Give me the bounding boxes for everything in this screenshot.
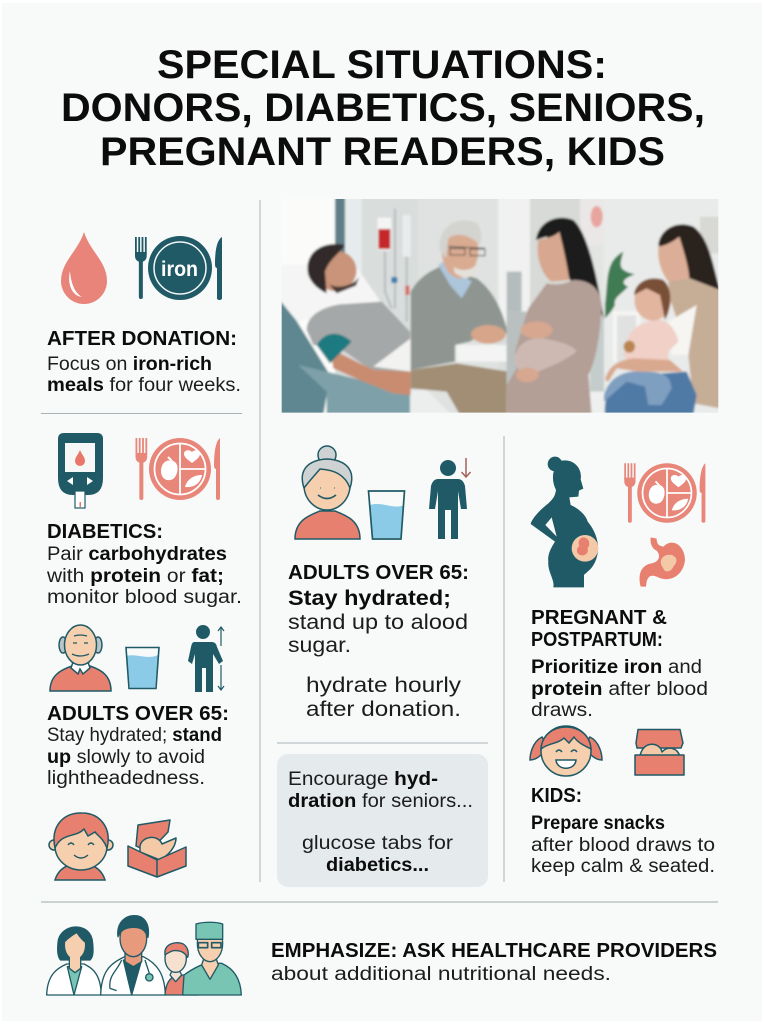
text: emphasize xyxy=(271,940,717,985)
icon: balanced plate, diabetics xyxy=(136,438,220,500)
surgeon xyxy=(183,922,241,995)
text: diabetics: with protein or fat; xyxy=(46,566,224,587)
title: PREGNANT READERS, KIDS xyxy=(100,130,665,174)
icon: blood drop xyxy=(61,232,107,304)
callout: seniors and diabetics tips: glucose tabs for xyxy=(302,833,454,854)
text: after donation: AFTER DONATION: xyxy=(47,328,237,350)
title: DONORS, DIABETICS, SENIORS, xyxy=(61,86,705,130)
icon: iron plate with fork and knife xyxy=(135,236,222,300)
text: adults over 65, left column: up slowly to avoid xyxy=(47,747,205,768)
text: emphasize: EMPHASIZE: ASK HEALTHCARE PROVIDERS xyxy=(271,940,717,962)
text: kids: after blood draws to xyxy=(531,835,715,856)
icon: figure with down arrow xyxy=(429,458,470,539)
male doctor with stethoscope xyxy=(101,916,165,995)
text: pregnant and postpartum: Prioritize iron and xyxy=(531,657,702,678)
icon: smiling boy xyxy=(49,813,113,880)
text: diabetics: monitor blood sugar. xyxy=(47,587,242,608)
callout: seniors and diabetics tips: diabetics... xyxy=(326,855,429,876)
icon: snack box xyxy=(128,820,186,877)
icon: balanced plate, pregnant xyxy=(624,463,705,523)
icon: healthcare team xyxy=(47,916,241,995)
icon: older man xyxy=(50,625,111,691)
text: kids: Prepare snacks xyxy=(531,813,665,834)
text: adults over 65, centre column: ADULTS OVER 65: xyxy=(288,562,469,584)
icon: smiling girl with pigtails xyxy=(530,726,602,776)
text: pregnant and postpartum: draws. xyxy=(531,700,593,721)
text: adults over 65, left column xyxy=(47,703,229,789)
text: adults over 65, left column: Stay hydrated; stand xyxy=(47,725,222,746)
icon: grandmother xyxy=(295,446,360,539)
text: kids: KIDS: xyxy=(531,785,582,807)
text: emphasize: about additional nutritional needs. xyxy=(271,964,611,985)
text: adults over 65, centre column: Stay hydrated; xyxy=(288,587,451,610)
text: pregnant and postpartum xyxy=(531,607,708,721)
callout: seniors and diabetics tips: dration for seniors... xyxy=(288,791,473,812)
text: kids xyxy=(531,785,715,877)
photo collage xyxy=(280,197,720,415)
photo panel: pregnant woman xyxy=(507,197,604,415)
text: after donation xyxy=(47,328,241,396)
icon: pregnant silhouette xyxy=(531,457,598,587)
icon: water glass, centre column xyxy=(368,491,404,539)
text: kids: keep calm & seated. xyxy=(531,856,715,877)
photo panel: mother and child xyxy=(604,197,720,415)
icon: standing figure with up and down arrows xyxy=(188,625,224,692)
text: adults over 65, left column: ADULTS OVER 65: xyxy=(47,703,229,725)
child patient xyxy=(165,943,198,995)
text: diabetics: Pair carbohydrates xyxy=(47,544,227,565)
title xyxy=(61,43,705,174)
icon: glucose meter xyxy=(58,433,103,508)
text: adults over 65, centre column: sugar. xyxy=(288,634,351,657)
text: adults over 65, centre column: hydrate hourly xyxy=(306,674,462,697)
text: adults over 65, centre column: after donation. xyxy=(306,698,461,721)
title: SPECIAL SITUATIONS: xyxy=(157,43,607,87)
text: after donation: Focus on iron-rich xyxy=(47,354,212,375)
text: adults over 65, left column: lightheadedness. xyxy=(47,768,205,789)
text: pregnant and postpartum: PREGNANT & xyxy=(531,607,667,629)
text: adults over 65, centre column xyxy=(288,562,469,721)
icon: stomach xyxy=(640,537,685,587)
text: pregnant and postpartum: POSTPARTUM: xyxy=(531,629,663,651)
iron label: iron xyxy=(161,258,198,281)
photo panel: older man at table xyxy=(411,220,508,415)
female doctor xyxy=(47,927,101,995)
divider lines xyxy=(41,200,718,902)
photo panel: blood donor resting xyxy=(280,197,510,415)
text: pregnant and postpartum: protein after blood xyxy=(531,679,708,700)
text: diabetics xyxy=(46,521,242,608)
text: after donation: meals for four weeks. xyxy=(47,375,241,396)
text: adults over 65, centre column: stand up to alood xyxy=(288,611,468,634)
icon: glass of water xyxy=(126,648,159,688)
icon: lunch box xyxy=(635,730,684,775)
callout: seniors and diabetics tips: Encourage hyd- xyxy=(288,769,438,790)
callout: seniors and diabetics tips xyxy=(277,754,488,887)
text: diabetics: DIABETICS: xyxy=(47,521,163,543)
